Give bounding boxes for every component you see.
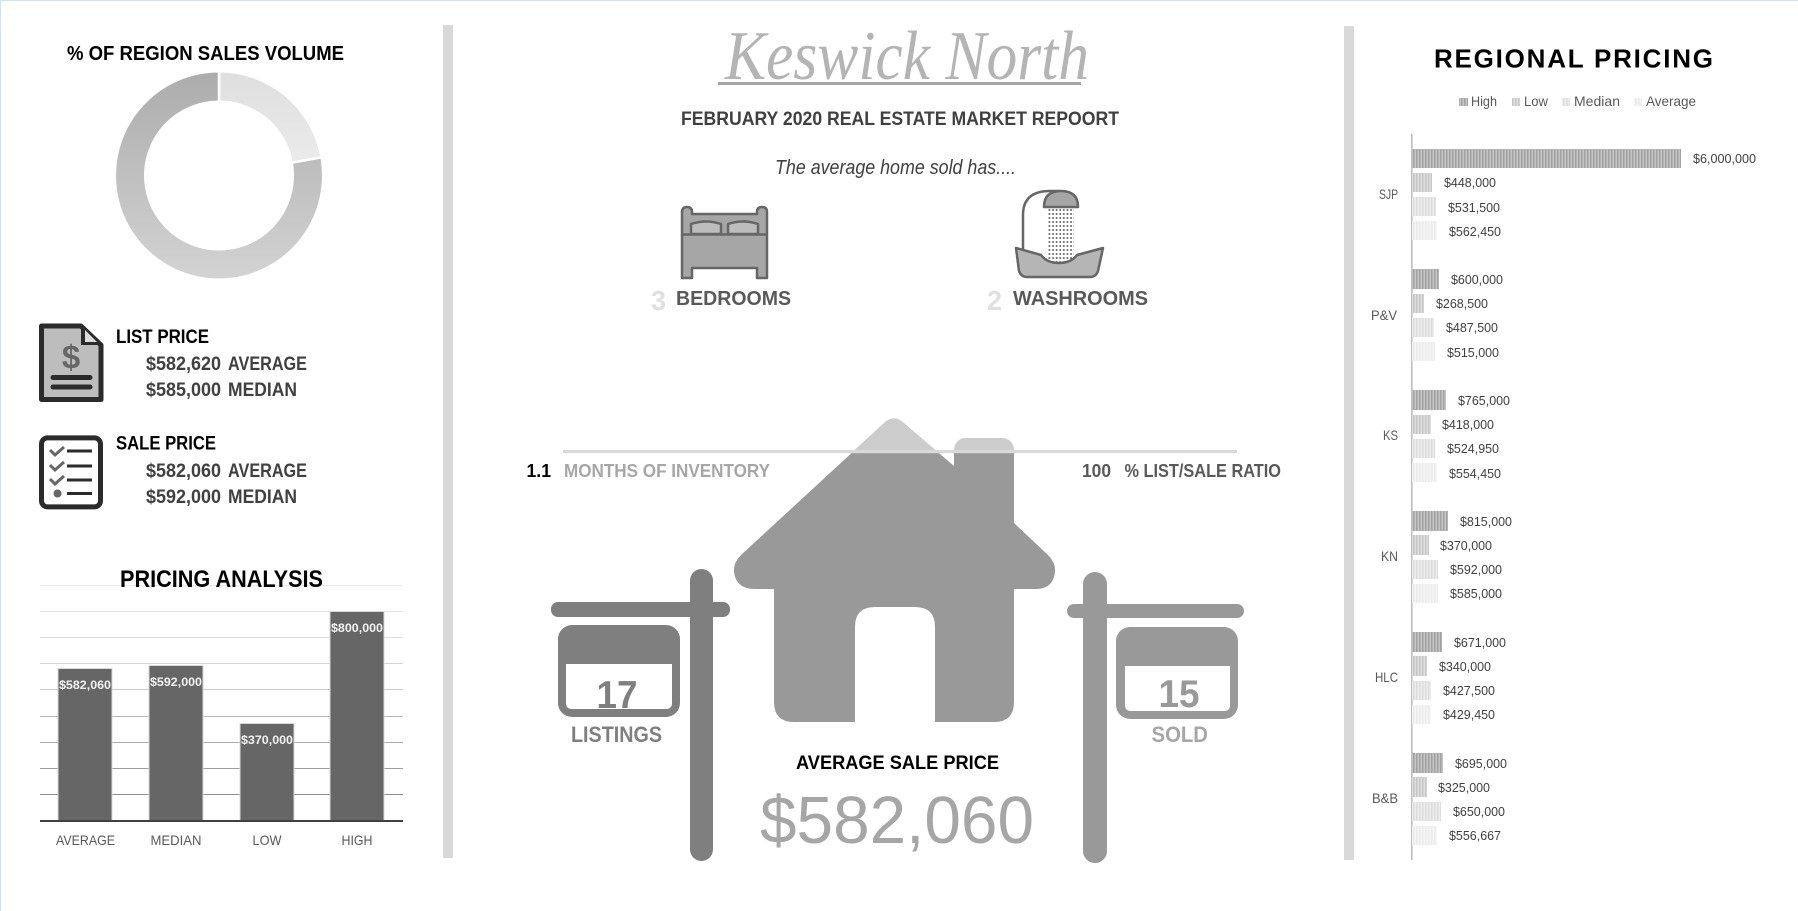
bar: average: $582,060	[59, 678, 111, 692]
text: average home intro: The average home sold has....	[775, 157, 1016, 179]
group: B&B: $695,000	[1455, 756, 1507, 771]
heading: average sale price: AVERAGE SALE PRICE	[796, 753, 999, 774]
heading: pricing analysis: PRICING ANALYSIS	[120, 566, 323, 593]
text block: sale price	[116, 432, 307, 508]
bar chart: pricing analysis: MEDIAN	[150, 832, 202, 848]
icon: shower tub	[1016, 191, 1103, 277]
stat: bedrooms: 3	[651, 285, 666, 316]
icon: price document	[42, 326, 101, 400]
group: P&V: $600,000	[1451, 272, 1503, 287]
panel: center column	[526, 18, 1281, 863]
stat: washrooms	[987, 285, 1148, 316]
bar: high	[330, 612, 384, 820]
bar: median: $592,000	[150, 675, 202, 689]
group: KN: $592,000	[1450, 562, 1502, 577]
label: listings: LISTINGS	[571, 722, 662, 747]
text block: list price	[116, 326, 307, 401]
group: HLC: $340,000	[1439, 659, 1491, 674]
bar chart: pricing analysis: LOW	[252, 832, 282, 848]
bar: low: $370,000	[241, 733, 293, 747]
stat: months of inventory: MONTHS OF INVENTORY	[564, 460, 771, 481]
stat: bedrooms	[651, 285, 791, 316]
subtitle: FEBRUARY 2020 REAL ESTATE MARKET REPOORT	[681, 108, 1119, 130]
group: SJP: $448,000	[1444, 175, 1496, 190]
bar chart: pricing analysis: HIGH	[342, 832, 372, 848]
group: B&B: $325,000	[1438, 780, 1490, 795]
chart axis	[1411, 134, 1413, 860]
group: KS: $554,450	[1449, 466, 1501, 481]
group: P&V: $515,000	[1447, 345, 1499, 360]
chart legend: Median	[1574, 93, 1620, 109]
bar: median	[149, 666, 203, 820]
chart legend	[1459, 93, 1696, 109]
group: KN: $585,000	[1450, 586, 1502, 601]
text block: sale price: SALE PRICE	[116, 432, 216, 454]
icon: listings sign	[551, 569, 730, 861]
title: Keswick North: Keswick North	[724, 18, 1089, 95]
icon: price document: $	[62, 338, 80, 376]
bar chart: pricing analysis: AVERAGE	[56, 832, 115, 848]
stat: washrooms: 2	[987, 285, 1002, 316]
group: KN: $370,000	[1440, 538, 1492, 553]
group: B&B	[1372, 753, 1507, 845]
group: P&V	[1371, 269, 1503, 361]
group: HLC: $429,450	[1443, 707, 1495, 722]
chart legend: Low	[1524, 93, 1549, 109]
group: HLC	[1375, 632, 1506, 724]
group: HLC: HLC	[1375, 669, 1398, 685]
icon: sold sign	[1067, 572, 1244, 863]
bar: high: $800,000	[331, 621, 383, 635]
panel: regional pricing	[1371, 44, 1756, 860]
icon: listings sign: 17	[596, 674, 638, 717]
text block: list price: $585,000	[146, 380, 221, 401]
group: SJP	[1379, 149, 1756, 240]
icon: sold sign: 15	[1158, 673, 1200, 716]
icon: checklist	[42, 438, 100, 507]
group: KN: KN	[1381, 548, 1398, 564]
group: KS: $524,950	[1447, 441, 1499, 456]
group: SJP: SJP	[1379, 186, 1398, 202]
group: P&V: $268,500	[1436, 296, 1488, 311]
heading: % of region sales volume: % OF REGION SALES VOLUME	[67, 43, 344, 65]
group: B&B: $556,667	[1449, 828, 1501, 843]
text block: sale price: $592,000	[146, 487, 221, 508]
group: HLC: $427,500	[1443, 683, 1495, 698]
group: P&V: P&V	[1371, 307, 1398, 323]
group: B&B: $650,000	[1453, 804, 1505, 819]
group: P&V: $487,500	[1446, 320, 1498, 335]
stat: list/sale ratio: 100	[1082, 460, 1111, 481]
bar: low	[240, 724, 294, 820]
group: KN	[1381, 511, 1512, 603]
stat: months of inventory: 1.1	[526, 460, 551, 481]
panel: left column	[40, 43, 403, 848]
text block: list price: LIST PRICE	[116, 326, 209, 348]
text block: sale price: MEDIAN	[228, 487, 297, 508]
bar: average	[58, 668, 112, 820]
group: SJP: $531,500	[1448, 200, 1500, 215]
group: KS	[1383, 390, 1510, 482]
group: SJP: $6,000,000	[1693, 151, 1756, 166]
stat: bedrooms: BEDROOMS	[676, 287, 791, 310]
divider line across house	[563, 450, 1237, 453]
group: KS: KS	[1383, 427, 1398, 443]
group: B&B: B&B	[1372, 790, 1398, 806]
group: KS: $418,000	[1442, 417, 1494, 432]
group: SJP: $562,450	[1449, 224, 1501, 239]
icon: bed	[682, 207, 767, 278]
heading: regional pricing: REGIONAL PRICING	[1434, 44, 1713, 74]
text block: list price: MEDIAN	[228, 380, 297, 401]
text block: list price: AVERAGE	[228, 354, 307, 375]
text block: list price: $582,620	[146, 354, 221, 375]
text block: sale price: $582,060	[146, 461, 221, 482]
label: sold: SOLD	[1152, 722, 1208, 747]
stat: list/sale ratio: % LIST/SALE RATIO	[1124, 460, 1281, 481]
big number: average sale price: $582,060	[760, 783, 1034, 858]
stat: washrooms: WASHROOMS	[1013, 287, 1148, 310]
donut chart	[115, 71, 323, 280]
group: HLC: $671,000	[1454, 635, 1506, 650]
bar chart: pricing analysis	[40, 566, 403, 848]
chart legend: High	[1471, 93, 1497, 109]
chart legend: Average	[1646, 93, 1696, 109]
icon: house	[734, 418, 1055, 722]
group: KS: $765,000	[1458, 393, 1510, 408]
text block: sale price: AVERAGE	[228, 461, 307, 482]
group: KN: $815,000	[1460, 514, 1512, 529]
